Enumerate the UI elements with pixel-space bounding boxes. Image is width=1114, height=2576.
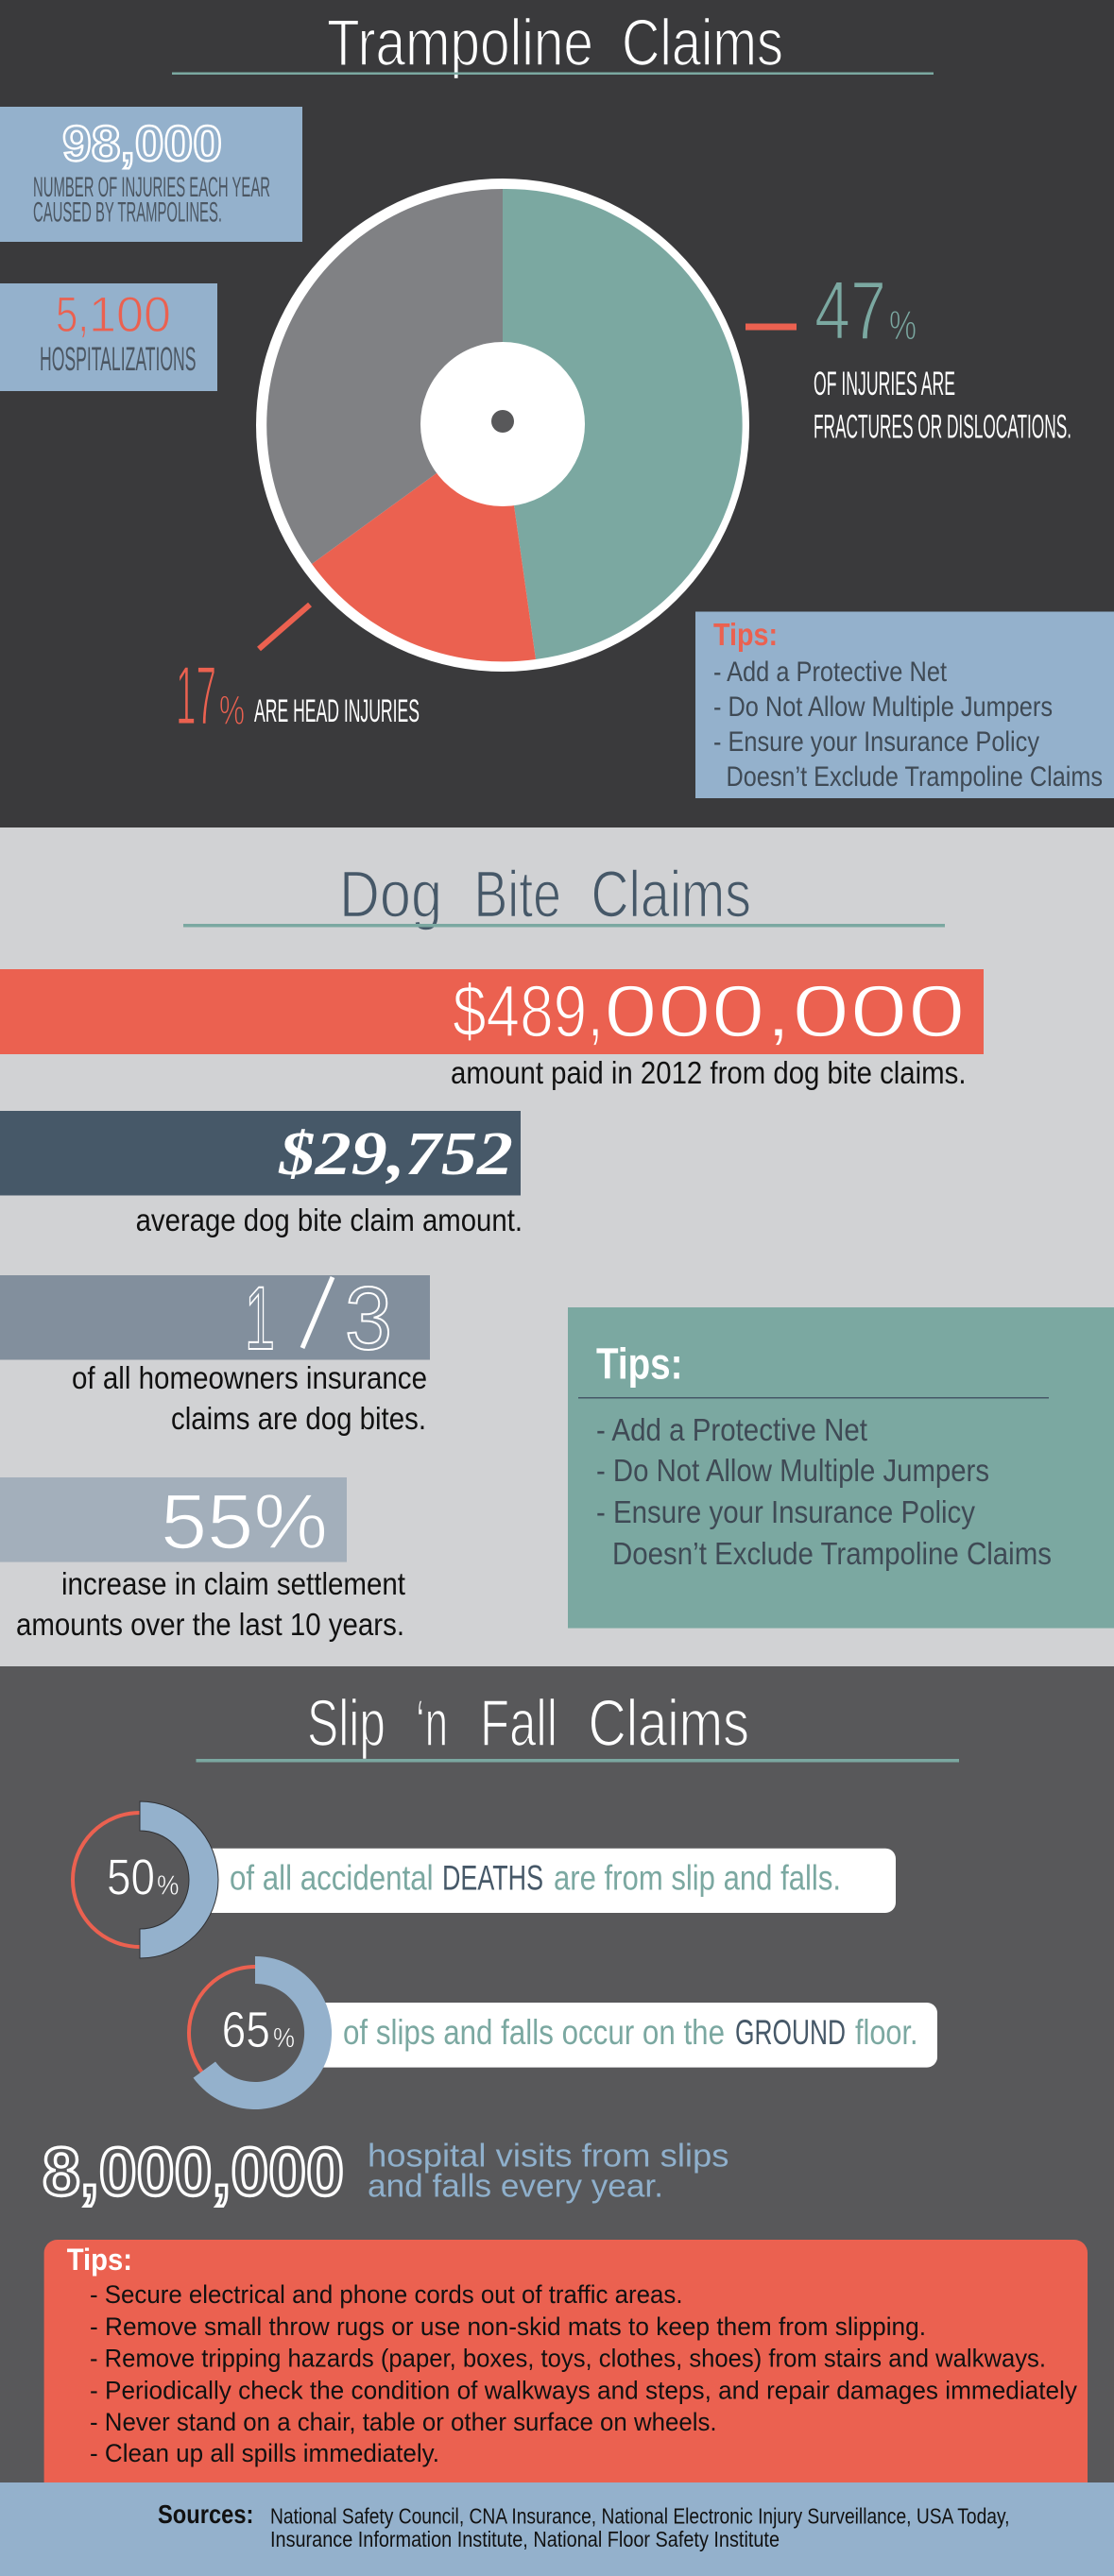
callout: 47% of injuries: OF INJURIES ARE	[814, 366, 955, 402]
stat box: 98,000 injuries: CAUSED BY TRAMPOLINES.	[33, 196, 222, 229]
heading: Dog Bite Claims: Dog	[339, 858, 442, 931]
stat box: 98,000 injuries	[0, 107, 302, 242]
tips box: slip and fall: - Never stand on a chair, table or other surface on wheels.	[90, 2408, 717, 2436]
panel: slip and fall claims	[0, 1666, 1114, 2482]
tips box: slip and fall: - Periodically check the condition of walkways and steps, and repair damages immediately	[90, 2377, 1077, 2405]
tips box: trampoline: - Do Not Allow Multiple Jumpers	[713, 691, 1053, 723]
stat bar: 1/3: claims are dog bites.	[171, 1401, 426, 1436]
stat box: 5,100 hospitalizations: 5,	[56, 287, 89, 343]
panel: sources footer	[0, 2482, 1114, 2576]
stat row: 50% of deaths	[73, 1801, 896, 1958]
label pill: deaths: DEATHS	[442, 1859, 543, 1897]
stat bar: $489,000,000: 000,	[604, 969, 792, 1052]
callout: 17% head injuries: ARE HEAD INJURIES	[254, 693, 420, 729]
stat bar: $29,752: $29,752	[278, 1119, 513, 1188]
heading: Trampoline Claims: Trampoline	[327, 6, 593, 79]
stat box: 5,100 hospitalizations: 100	[89, 287, 171, 343]
tips box: slip and fall: - Remove tripping hazards (paper, boxes, toys, clothes, shoes) from stairs and walkways.	[90, 2345, 1046, 2373]
tips box: dog bite: Tips:	[596, 1339, 682, 1389]
tips box: dog bite: - Ensure your Insurance Policy	[596, 1494, 975, 1529]
donut: 50%	[73, 1801, 218, 1958]
stat bar: $489,000,000	[0, 969, 984, 1090]
tips box: dog bite: Doesn’t Exclude Trampoline Claims	[612, 1536, 1052, 1571]
callout: 47% of injuries: %	[889, 302, 917, 349]
stat: 8,000,000 hospital visits: hospital visits from slips	[368, 2139, 729, 2175]
label pill: ground floor: GROUND	[735, 2013, 846, 2052]
stat: 8,000,000 hospital visits: 8,000,000	[43, 2135, 344, 2210]
callout: 47% of injuries	[746, 264, 1071, 446]
stat bar: $489,000,000: $489,	[453, 969, 604, 1052]
stat bar: 55%: 55%	[161, 1477, 328, 1565]
tips box: dog bite: - Add a Protective Net	[596, 1412, 867, 1447]
stat: 8,000,000 hospital visits	[43, 2135, 729, 2210]
label pill: ground floor	[302, 2003, 937, 2068]
stat bar: 55%: amounts over the last 10 years.	[16, 1607, 404, 1642]
slice: 17% head injuries	[312, 425, 536, 661]
heading: Dog Bite Claims: Claims	[591, 858, 751, 931]
stat box: 5,100 hospitalizations	[0, 283, 217, 391]
heading: Trampoline Claims: Claims	[622, 6, 783, 79]
label pill: deaths: of all accidental	[230, 1859, 434, 1897]
donut: 65%: %	[273, 2023, 295, 2054]
tips box: dog bite: - Do Not Allow Multiple Jumpers	[596, 1453, 989, 1488]
tips box: dog bite	[568, 1307, 1114, 1629]
stat bar: $29,752: average dog bite claim amount.	[136, 1203, 523, 1237]
heading: Trampoline Claims	[172, 6, 934, 79]
heading: Dog Bite Claims: Bite	[474, 858, 561, 931]
stat bar: $489,000,000: amount paid in 2012 from dog bite claims.	[451, 1055, 966, 1090]
donut: 50%: %	[157, 1870, 180, 1901]
tips box: slip and fall: - Remove small throw rugs or use non-skid mats to keep them from slipping.	[90, 2312, 926, 2341]
label pill: ground floor: of slips and falls occur on the	[343, 2013, 725, 2052]
heading: Slip 'n Fall Claims: Slip	[307, 1686, 386, 1760]
panel: trampoline claims	[0, 0, 1114, 827]
stat bar: 55%: increase in claim settlement	[61, 1566, 405, 1601]
tips box: slip and fall: - Secure electrical and phone cords out of traffic areas.	[90, 2280, 682, 2309]
stat row: 65% ground floor	[189, 1956, 937, 2109]
donut: 50%: 50	[107, 1850, 155, 1906]
tips box: slip and fall	[44, 2240, 1088, 2482]
tips box: trampoline: - Add a Protective Net	[713, 657, 948, 688]
stat bar: $489,000,000: 000	[792, 969, 966, 1052]
tips box: trampoline: - Ensure your Insurance Policy	[713, 726, 1039, 758]
stat bar: $29,752	[0, 1111, 523, 1237]
heading: Dog Bite Claims	[183, 858, 945, 931]
tips box: slip and fall: - Clean up all spills immediately.	[90, 2439, 439, 2467]
donut: 65%	[189, 1956, 332, 2109]
label pill: deaths	[189, 1849, 896, 1913]
panel: dog bite claims	[0, 827, 1114, 1666]
stat bar: 1/3: of all homeowners insurance	[72, 1360, 427, 1395]
tips box: slip and fall: Tips:	[67, 2243, 132, 2277]
label pill: deaths: are from slip and falls.	[554, 1859, 841, 1897]
callout: 17% head injuries: %	[219, 688, 245, 733]
callout: 17% head injuries	[176, 605, 420, 742]
pie chart: injury types	[256, 179, 749, 672]
donut: 65%: 65	[222, 2002, 270, 2058]
stat bar: 1/3: 3	[345, 1269, 392, 1369]
callout: 47% of injuries: 47	[814, 264, 886, 357]
panel: sources footer: Sources:	[158, 2499, 253, 2529]
tips box: trampoline: Tips:	[713, 617, 778, 652]
stat box: 5,100 hospitalizations: HOSPITALIZATIONS	[40, 341, 197, 378]
callout: 17% head injuries: 17	[176, 648, 216, 742]
stat: 8,000,000 hospital visits: and falls every year.	[368, 2169, 663, 2205]
label pill: ground floor: floor.	[855, 2013, 918, 2052]
heading: Slip 'n Fall Claims: Claims	[588, 1686, 749, 1760]
panel: sources footer: Insurance Information Institute, National Floor Safety Institute	[270, 2527, 780, 2551]
heading: Slip 'n Fall Claims	[197, 1686, 959, 1763]
heading: Slip 'n Fall Claims: ‘n	[416, 1686, 448, 1760]
heading: Slip 'n Fall Claims: Fall	[480, 1686, 557, 1760]
slice: other injuries	[266, 189, 503, 564]
tips box: trampoline	[695, 612, 1114, 798]
stat bar: 1/3: 1	[245, 1269, 275, 1369]
stat box: 98,000 injuries: 98,000	[62, 116, 222, 172]
stat bar: 1/3	[0, 1269, 430, 1436]
stat box: 98,000 injuries: NUMBER OF INJURIES EACH YEAR	[33, 172, 270, 203]
slice: 47% fractures	[503, 189, 743, 659]
stat bar: 55%	[0, 1477, 405, 1642]
